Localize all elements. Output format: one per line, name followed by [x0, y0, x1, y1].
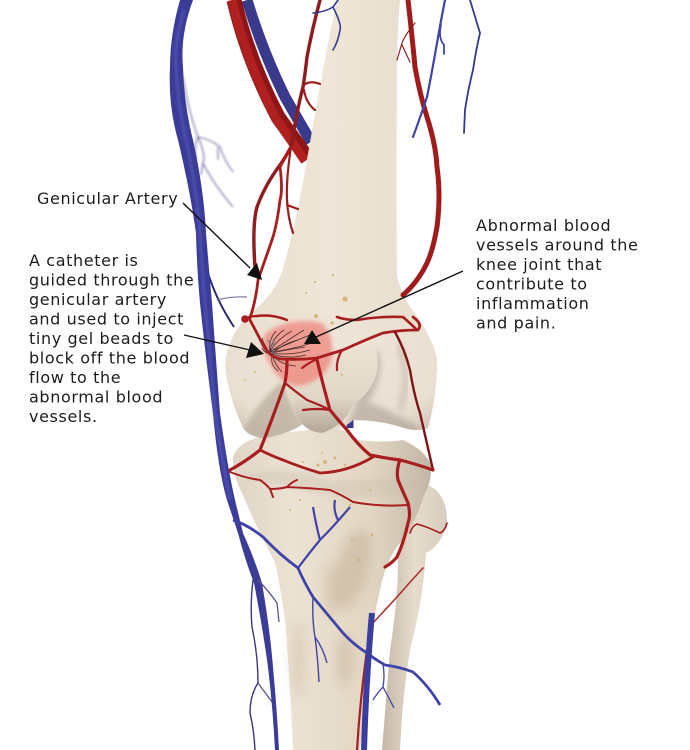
callout: catheter description: A catheter is — [29, 251, 139, 270]
arrow: to genicular artery — [183, 203, 262, 280]
callout: abnormal vessels description: contribute to — [476, 274, 588, 294]
blue veins on lower leg — [233, 500, 440, 750]
femoral condyles — [225, 307, 437, 438]
patella — [286, 345, 378, 433]
genicular artery — [250, 147, 291, 318]
top femoral tributary — [313, 0, 340, 50]
deep posterior vein — [364, 613, 372, 750]
anterior tibial vein — [233, 520, 440, 705]
arrow: to catheter site — [184, 335, 264, 358]
femoral shading — [243, 345, 425, 442]
callout: catheter description: guided through the — [29, 270, 194, 290]
small branches of feeder — [287, 82, 320, 233]
callout: catheter description: and used to inject — [29, 310, 184, 328]
callout: abnormal vessels description: and pain. — [476, 314, 556, 332]
callout: catheter description: tiny gel beads to — [29, 329, 174, 348]
callout: abnormal vessels description: knee joint that — [476, 255, 602, 274]
faint superficial veins upper left — [183, 77, 233, 207]
central large artery — [232, 0, 308, 161]
plateau shading — [238, 470, 428, 498]
callout: genicular artery label: Genicular Artery — [37, 189, 178, 208]
central deep vein behind femur — [247, 0, 311, 142]
deep vein branch behind knee — [207, 270, 247, 327]
callout: catheter description: genicular artery — [29, 290, 167, 309]
main left vein — [170, 0, 279, 750]
tibia bone — [233, 428, 431, 750]
callout: abnormal vessels description: Abnormal blood — [476, 216, 611, 235]
callout: catheter description: vessels. — [29, 407, 98, 426]
peroneal branches — [373, 665, 394, 708]
medial descending artery — [230, 360, 287, 470]
arrow: to abnormal vessels — [304, 271, 463, 344]
inferior genicular arteries — [230, 472, 408, 506]
fibula bone — [382, 486, 447, 750]
right vein — [413, 0, 445, 137]
deep vein segment in gap — [346, 417, 354, 428]
blob and superior network — [245, 316, 287, 320]
upper left feeder artery — [254, 0, 320, 267]
abnormal blood vessels — [262, 330, 312, 372]
femur bone — [225, 0, 437, 442]
callout: catheter description: abnormal blood — [29, 388, 163, 406]
small branches upper right — [397, 23, 415, 62]
mid tibial branches — [313, 597, 327, 682]
saphenous tributaries — [250, 580, 258, 750]
bone surface speckles — [244, 274, 374, 561]
callout: abnormal vessels description: inflammation — [476, 294, 590, 313]
upper blue veins — [313, 0, 480, 137]
lateral descending artery — [395, 332, 433, 470]
tibial shading — [293, 525, 378, 700]
right femoral artery — [403, 0, 439, 295]
callout: abnormal vessels description: vessels around the — [476, 236, 638, 254]
upper tibial branches — [298, 500, 350, 568]
callout: catheter description: flow to the — [29, 368, 121, 387]
inflamed pink region — [263, 321, 332, 386]
arteries over knee — [230, 0, 447, 750]
far right vein — [464, 0, 480, 133]
callout: catheter description: block off the blood — [29, 348, 190, 368]
central descending artery — [317, 360, 433, 470]
fibular arteries — [410, 523, 447, 533]
